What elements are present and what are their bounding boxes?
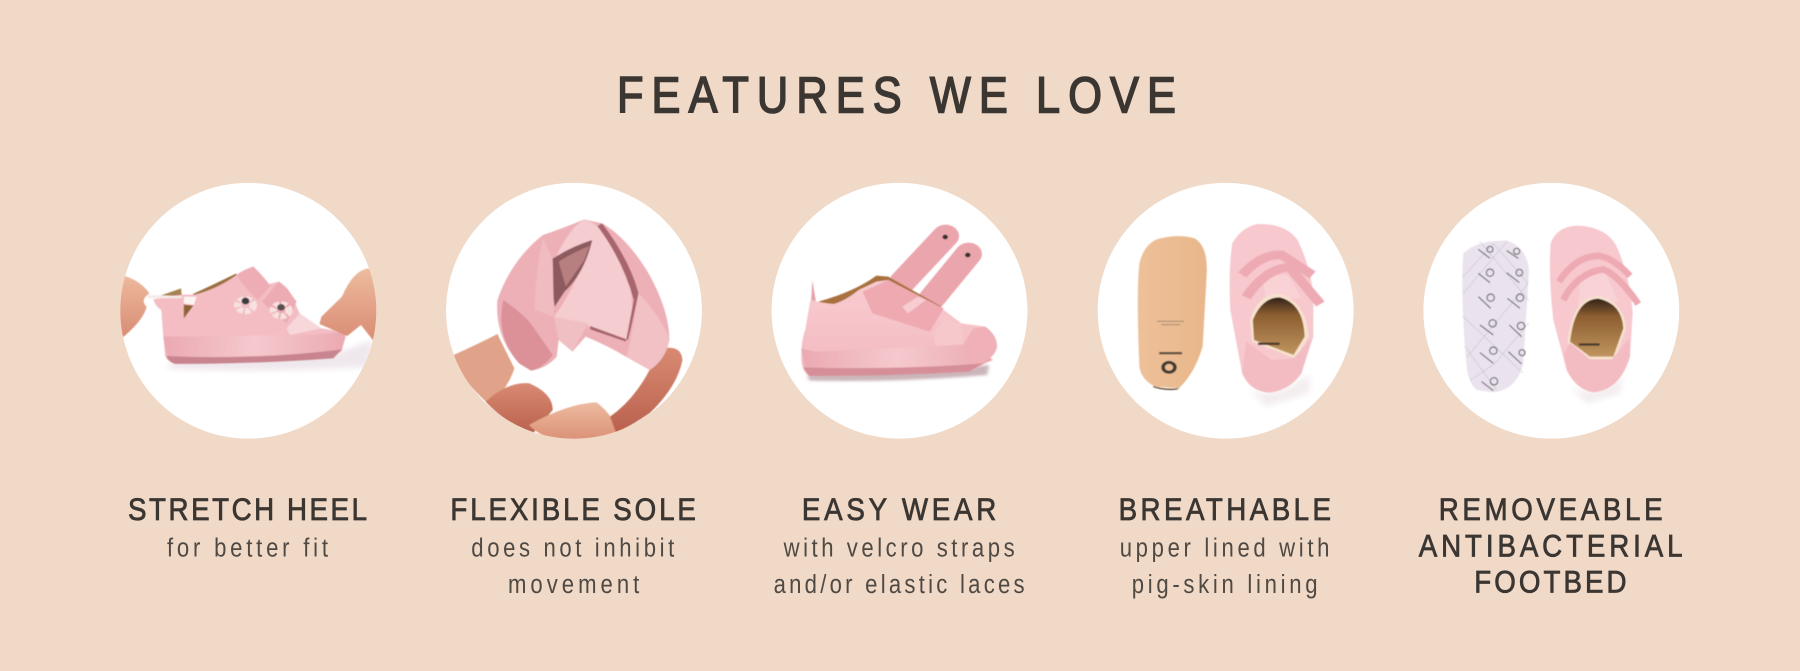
panel: easy wear xyxy=(772,183,1028,599)
panel: breathable xyxy=(1098,183,1354,599)
photo circle: leather insole and shoe from above xyxy=(1098,183,1354,439)
heading: flexible sole: FLEXIBLE SOLE xyxy=(450,492,696,527)
text: with velcro straps and/or elastic laces xyxy=(774,534,1025,599)
text: does not inhibit movement: movement xyxy=(508,570,640,599)
photo circle: bent flexible shoe xyxy=(446,183,702,443)
heading: breathable: BREATHABLE xyxy=(1119,492,1331,527)
photo circle: printed footbed and shoe from above xyxy=(1423,183,1679,439)
heading: removeable antibacterial footbed xyxy=(1419,492,1683,600)
heading: removeable antibacterial footbed: ANTIBACTERIAL xyxy=(1419,529,1683,564)
text: does not inhibit movement: does not inhibit xyxy=(471,534,675,563)
text: upper lined with pig-skin lining: pig-skin lining xyxy=(1132,570,1318,599)
text: does not inhibit movement xyxy=(471,534,675,599)
text: with velcro straps and/or elastic laces: with velcro straps xyxy=(783,534,1015,563)
photo circle: stretch heel shoe xyxy=(116,183,381,439)
panel: removeable footbed xyxy=(1419,183,1683,600)
title: FEATURES WE LOVE xyxy=(617,67,1176,124)
heading: stretch heel: STRETCH HEEL xyxy=(128,492,367,527)
heading: removeable antibacterial footbed: FOOTBED xyxy=(1474,565,1627,600)
photo circle: shoe with velcro straps open xyxy=(772,183,1028,439)
icon: shoe seen from above xyxy=(1230,224,1320,393)
text: for better fit: for better fit xyxy=(167,534,328,563)
panel: flexible sole xyxy=(446,183,702,599)
text: upper lined with pig-skin lining: upper lined with xyxy=(1120,534,1329,563)
infographic canvas xyxy=(120,76,1682,598)
text: with velcro straps and/or elastic laces: and/or elastic laces xyxy=(774,570,1025,599)
heading: removeable antibacterial footbed: REMOVEABLE xyxy=(1439,492,1663,527)
icon: shoe seen from above xyxy=(1550,226,1638,392)
heading: easy wear: EASY WEAR xyxy=(802,492,996,527)
text: upper lined with pig-skin lining xyxy=(1120,534,1329,599)
icon: antibacterial printed footbed xyxy=(1462,241,1529,392)
panel: stretch heel xyxy=(116,183,381,563)
icon: tan leather insole xyxy=(1138,236,1207,390)
